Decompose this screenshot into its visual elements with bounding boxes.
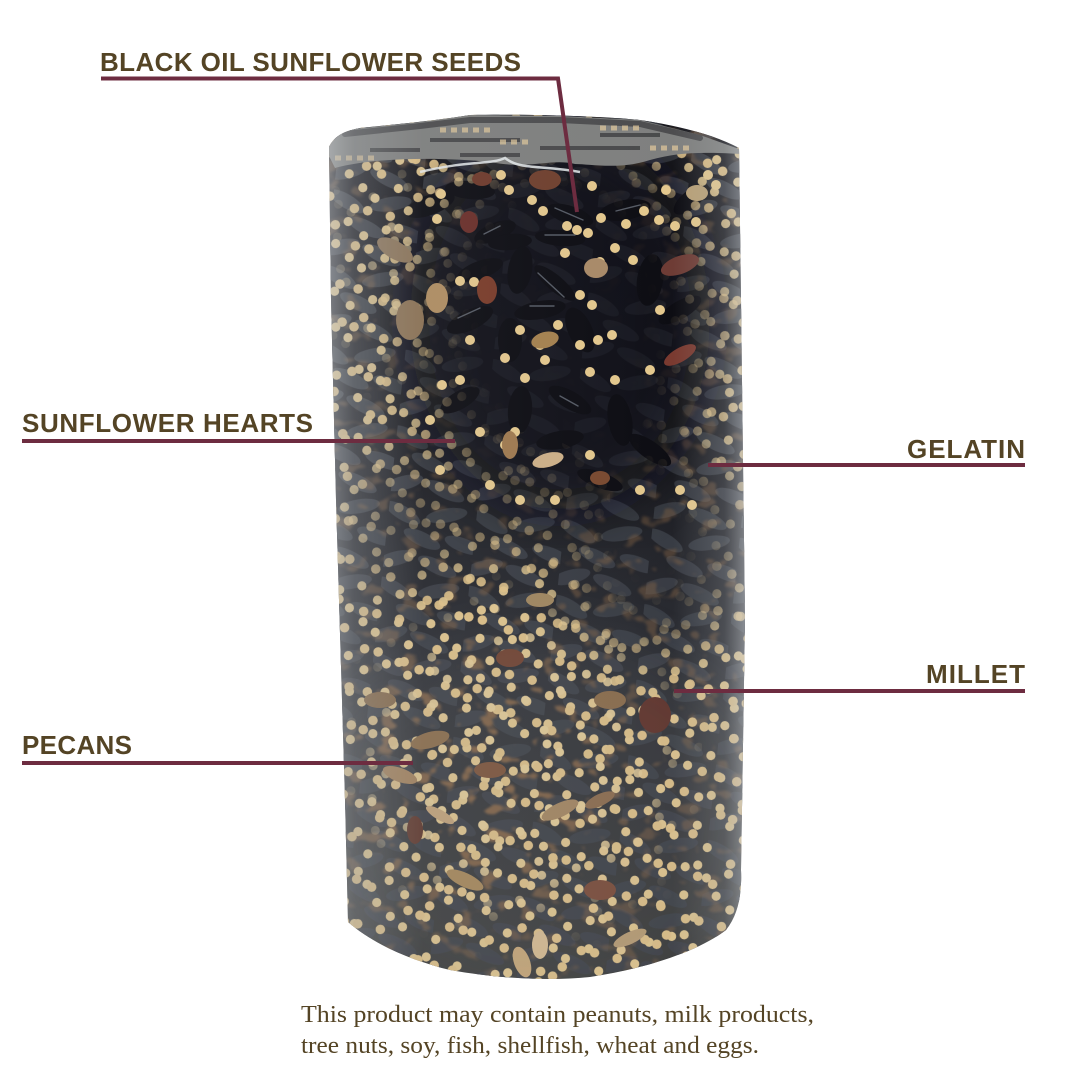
lower gelatin haze <box>356 652 742 979</box>
top face of cylinder <box>325 115 742 172</box>
callout: sunflower hearts: SUNFLOWER HEARTS <box>22 408 313 438</box>
allergen note: This product may contain peanuts, milk products, <box>301 1002 814 1028</box>
callout: gelatin: GELATIN <box>907 434 1025 464</box>
callout: black oil sunflower seeds <box>100 47 577 212</box>
callout: millet: MILLET <box>926 659 1025 689</box>
pecan and heart pieces <box>364 170 708 980</box>
gelatin film side haze <box>320 100 750 1000</box>
dark shading over the upper centre <box>410 130 710 510</box>
allergen note <box>301 1002 814 1059</box>
upper millet grains <box>425 170 721 510</box>
callout: black oil sunflower seeds: BLACK OIL SUNFLOWER SEEDS <box>100 47 521 77</box>
cylinder base colour <box>320 100 760 1000</box>
upper large black seeds <box>402 179 711 496</box>
pecan pieces texture <box>320 100 760 1000</box>
callout: pecans: PECANS <box>22 730 132 760</box>
lower dense millet layer <box>332 168 702 941</box>
upper seed highlights <box>458 205 640 406</box>
black sunflower seed texture <box>320 100 760 1000</box>
allergen note: tree nuts, soy, fish, shellfish, wheat and eggs. <box>301 1033 759 1059</box>
scattered millet layer B <box>320 100 760 1000</box>
scattered millet layer A <box>320 100 760 1000</box>
product photo: seed cylinder <box>329 114 745 979</box>
